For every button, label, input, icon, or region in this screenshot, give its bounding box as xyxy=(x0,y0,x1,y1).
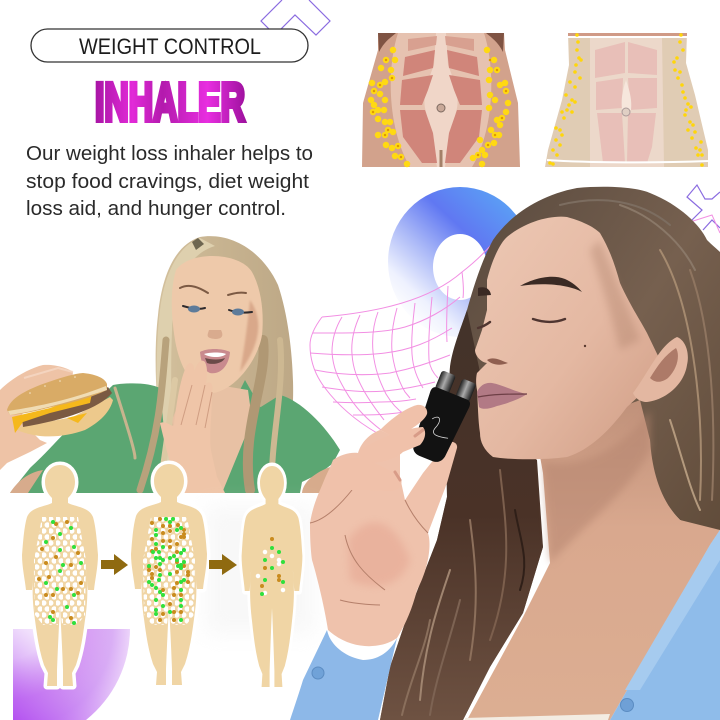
white panel behind body figures xyxy=(0,493,320,720)
decorative blue donut xyxy=(388,187,532,337)
neck and chest xyxy=(467,400,720,720)
hair main xyxy=(380,187,720,720)
description text: stop food cravings, diet weight xyxy=(26,171,309,193)
illustration: abdomen after xyxy=(545,33,708,167)
features xyxy=(180,286,252,313)
neck and chest xyxy=(172,380,252,493)
eyebrows xyxy=(478,277,582,296)
heading pill: WEIGHT CONTROL xyxy=(79,34,261,59)
nose shadow xyxy=(487,358,508,365)
closed eyes xyxy=(478,319,565,328)
hair highlights xyxy=(402,200,713,715)
arrow xyxy=(209,554,237,575)
heading pill xyxy=(31,29,308,62)
shirt xyxy=(10,383,340,493)
hand with burger xyxy=(0,365,73,470)
mole xyxy=(584,345,586,347)
lips xyxy=(477,383,527,409)
hair back xyxy=(133,236,294,493)
photo: woman using the inhaler xyxy=(290,187,720,720)
description text: Our weight loss inhaler helps to xyxy=(26,143,313,165)
decorative diamonds right xyxy=(687,185,720,230)
face xyxy=(475,217,660,459)
cheek and temple shading xyxy=(590,240,640,350)
camisole xyxy=(465,714,610,720)
fat dots xyxy=(550,35,702,165)
figure: body during xyxy=(131,464,207,685)
shirt right xyxy=(610,530,720,720)
figure: body after xyxy=(242,466,302,687)
raised hand xyxy=(160,361,225,493)
sleeve and shirt left xyxy=(290,630,397,720)
face xyxy=(172,256,263,393)
photo: blonde woman holding a burger xyxy=(0,236,345,493)
arrow xyxy=(101,554,128,575)
inhaler xyxy=(406,369,478,466)
ear xyxy=(633,337,688,402)
decorative purple quarter circle xyxy=(13,629,130,720)
decorative diamonds top xyxy=(261,0,330,35)
hand xyxy=(310,430,457,646)
hair strands front xyxy=(115,340,281,490)
title: INHALER xyxy=(95,72,245,132)
arms xyxy=(10,466,345,493)
figure: body before xyxy=(22,465,98,686)
fat dots xyxy=(371,50,508,164)
illustration: abdomen before xyxy=(362,33,520,167)
fingers over inhaler xyxy=(380,405,427,438)
description text xyxy=(26,143,313,220)
decorative pink wireframe grid xyxy=(310,215,720,433)
burger xyxy=(7,373,113,436)
description text: loss aid, and hunger control. xyxy=(26,198,286,220)
